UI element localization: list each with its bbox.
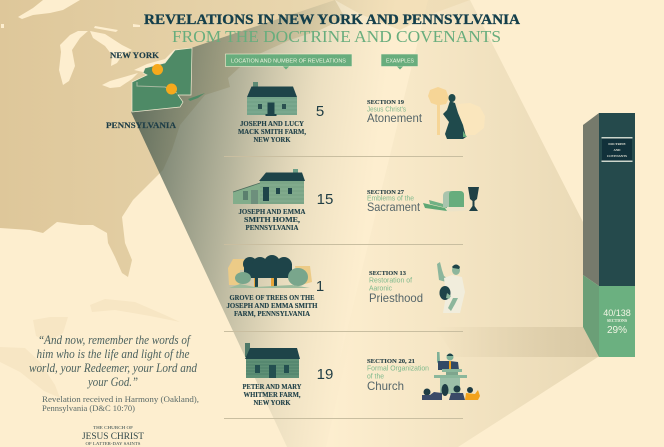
- section text: Priesthood: [369, 291, 423, 305]
- church logo: [82, 425, 145, 446]
- spine label: COVENANTS: [607, 154, 627, 158]
- lake erie: [102, 69, 142, 88]
- icon: speaker and congregation: [422, 352, 480, 400]
- location name: NEW YORK: [254, 136, 291, 144]
- section text: Restoration of: [369, 278, 412, 284]
- section text: [367, 189, 421, 214]
- faint Atlantic Canada: [335, 0, 470, 30]
- map of eastern North America: [0, 0, 470, 398]
- book side: [583, 113, 599, 286]
- example 1: Atonement: [367, 87, 485, 139]
- section text: [369, 270, 423, 305]
- section text: Emblems of the: [367, 196, 414, 202]
- header: examples: EXAMPLES: [386, 58, 414, 64]
- spine statistic: 29%: [607, 325, 627, 336]
- icon: log house: [247, 82, 297, 116]
- Long Island: [188, 93, 205, 101]
- section text: Sacrament: [367, 200, 421, 214]
- example 4: Church: [367, 352, 480, 400]
- row 4: Peter and Mary Whitmer farm: [242, 343, 333, 407]
- lake michigan: [59, 31, 88, 85]
- quote: [29, 332, 197, 389]
- spine statistic: [603, 308, 631, 336]
- quote: world, your Redeemer, your Lord and: [29, 360, 197, 375]
- label: Pennsylvania: PENNSYLVANIA: [106, 121, 176, 130]
- shadow beam from the map: [131, 0, 428, 447]
- label: New York: NEW YORK: [110, 51, 160, 60]
- book: Doctrine and Covenants: [583, 113, 635, 357]
- location name: JOSEPH AND LUCY: [240, 120, 304, 128]
- location name: [226, 294, 318, 318]
- section text: Aaronic: [369, 286, 392, 292]
- spine statistic: 40/138: [603, 308, 631, 318]
- spine label: [602, 137, 632, 162]
- section text: [367, 358, 429, 393]
- subtitle: FROM THE DOCTRINE AND COVENANTS: [172, 27, 501, 46]
- location name: [242, 383, 302, 407]
- quote attribution: Revelation received in Harmony (Oakland),: [42, 394, 199, 404]
- example 2: Sacrament: [367, 187, 479, 214]
- church logo: THE CHURCH OF: [93, 425, 134, 430]
- icon: baptism figures: [437, 262, 465, 313]
- location name: WHITMER FARM,: [244, 391, 301, 399]
- row 3: grove of trees: [226, 255, 324, 318]
- count: 1: [316, 278, 324, 295]
- book spine: [599, 113, 635, 286]
- icon: kneeling figure with olive trees: [428, 87, 485, 139]
- location name: FARM, PENNSYLVANIA: [234, 310, 310, 318]
- row 2: Joseph and Emma Smith home: [233, 169, 333, 232]
- dividers: [224, 156, 463, 418]
- lake superior: [18, 0, 80, 19]
- section text: Church: [367, 379, 404, 393]
- icon: trees: [228, 255, 312, 288]
- section text: Formal Organization: [367, 366, 429, 372]
- location name: PENNSYLVANIA: [246, 224, 298, 232]
- location name: JOSEPH AND EMMA: [238, 208, 306, 216]
- location name: JOSEPH AND EMMA SMITH: [226, 302, 318, 310]
- faint Cuba, Yucatan and Mexico: [0, 299, 180, 398]
- spine statistic: SECTIONS: [607, 318, 628, 323]
- title: REVELATIONS IN NEW YORK AND PENNSYLVANIA: [144, 12, 520, 28]
- quote attribution: [42, 394, 199, 413]
- row 1: Joseph and Lucy Mack Smith farm: [238, 82, 324, 144]
- icon: bread and cup: [423, 187, 479, 212]
- count: 19: [317, 366, 333, 383]
- location name: SMITH HOME,: [244, 216, 300, 224]
- quote: your God.”: [86, 374, 138, 389]
- location dot: Palmyra: [152, 64, 163, 75]
- location name: [238, 208, 306, 232]
- section text: SECTION 13: [369, 270, 407, 277]
- section text: Atonement: [367, 111, 423, 125]
- count: 5: [316, 103, 324, 120]
- count: 15: [317, 191, 333, 208]
- spine label: DOCTRINE: [608, 142, 626, 146]
- book shadow: [435, 327, 599, 357]
- header: location and number: LOCATION AND NUMBER OF REVELATIONS: [231, 58, 346, 64]
- spine filled portion: [599, 286, 635, 357]
- location name: [238, 120, 306, 144]
- quote attribution: Pennsylvania (D&C 10:70): [42, 403, 135, 413]
- header: location and number: [226, 54, 352, 70]
- highlighted states: [132, 48, 205, 112]
- quote: “And now, remember the words of: [38, 332, 192, 347]
- light beam to the book: [300, 0, 598, 447]
- location name: GROVE OF TREES ON THE: [230, 294, 315, 302]
- header: examples: [381, 54, 418, 70]
- location dot: Harmony: [166, 84, 177, 94]
- section text: SECTION 19: [367, 99, 405, 106]
- section text: SECTION 20, 21: [367, 358, 415, 365]
- church logo: JESUS CHRIST: [82, 431, 145, 441]
- church logo: OF LATTER-DAY SAINTS: [86, 441, 140, 446]
- icon: frame house: [233, 169, 305, 204]
- section text: SECTION 27: [367, 189, 405, 196]
- spine label: AND: [614, 148, 621, 152]
- New York and Pennsylvania: [132, 48, 192, 112]
- icon: log cabin: [245, 343, 300, 378]
- location name: MACK SMITH FARM,: [238, 128, 306, 136]
- location name: PETER AND MARY: [242, 383, 302, 391]
- example 3: Priesthood: [369, 262, 465, 313]
- lake ontario: [134, 49, 175, 72]
- section text: [367, 99, 423, 125]
- quote: him who is the life and light of the: [36, 346, 190, 361]
- section text: Jesus Christ's: [367, 106, 406, 114]
- location name: NEW YORK: [254, 399, 291, 407]
- section text: of the: [367, 374, 384, 380]
- lake huron: [90, 31, 132, 66]
